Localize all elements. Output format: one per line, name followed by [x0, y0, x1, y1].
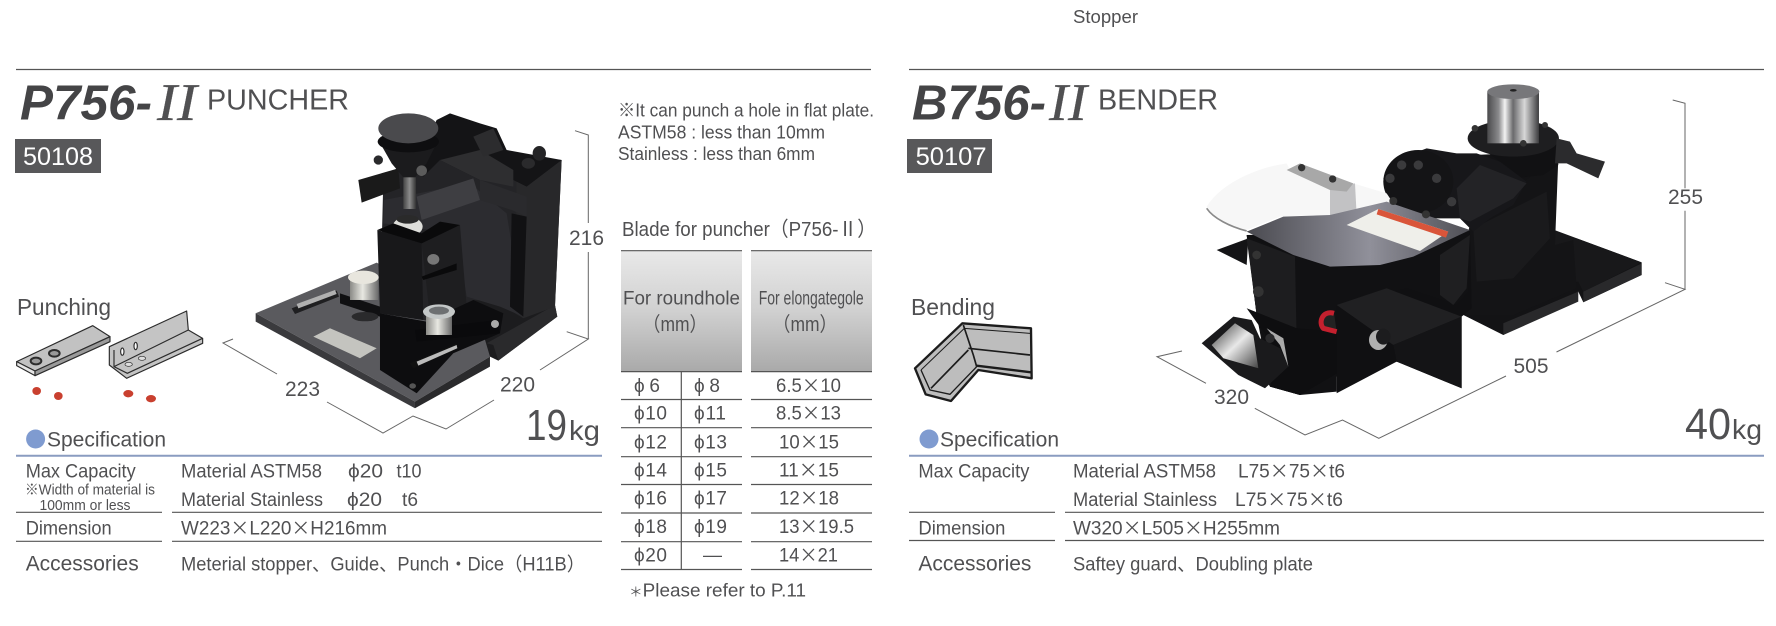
specification table: puncher: Meterial stopper、Guide、Punch・Dice（H11B）	[181, 554, 585, 576]
specification table: bender: Max Capacity	[918, 462, 1030, 482]
table: blade sizes: 12×18	[779, 483, 839, 510]
weight: 19kg	[526, 401, 600, 450]
table: blade sizes: ϕ20	[634, 546, 667, 566]
specification table: bender: Material ASTM58	[1073, 462, 1216, 482]
specification table: bender: Material Stainless	[1073, 490, 1217, 511]
table: blade sizes: ϕ17	[694, 488, 727, 509]
specification table: puncher: t6	[402, 490, 418, 511]
dimension value: 505: 505	[1514, 355, 1548, 378]
dimension lines: puncher	[223, 131, 588, 433]
weight: 40kg: kg	[1732, 414, 1762, 445]
specification table: puncher: Material ASTM58	[181, 462, 322, 482]
icon: bent angle sample	[915, 323, 1032, 401]
specification table: puncher: 100mm or less	[40, 497, 130, 514]
table: blade sizes: 11×15	[779, 456, 839, 482]
heading: P756-II PUNCHER: PUNCHER	[207, 84, 349, 116]
heading: B756-II BENDER: II	[1048, 74, 1090, 132]
table: blade sizes: ϕ6	[634, 376, 660, 397]
dimension value: 223: 223	[285, 378, 320, 401]
product code badge: 50107	[907, 139, 992, 173]
heading: P756-II PUNCHER: P756-	[20, 76, 152, 130]
specification table: puncher: ϕ20	[348, 462, 383, 482]
weight: 40kg: 40	[1685, 400, 1731, 449]
table: blade sizes: 13×19.5	[779, 512, 854, 539]
specification table: puncher: Max Capacity	[26, 462, 136, 482]
dimension value: 255: 255	[1668, 186, 1703, 209]
specification table: bender: W320×L505×H255mm	[1073, 514, 1280, 540]
table: blade sizes: 8.5×13	[776, 399, 841, 426]
table: blade sizes: ϕ15	[694, 460, 727, 482]
specification table: puncher: Material Stainless	[181, 490, 323, 511]
product code badge: 50108: 50108	[23, 143, 93, 171]
weight: 19kg: kg	[569, 415, 600, 446]
footnote: refer to P.11: ＊Please refer to P.11	[629, 580, 806, 600]
specification table: puncher: W223×L220×H216mm	[181, 514, 387, 540]
icon: punched flat bar and angle samples with slugs	[17, 311, 203, 402]
product code badge: 50108	[15, 139, 101, 173]
note: punching capacity in flat plate: Stainless : less than 6mm	[618, 144, 815, 164]
table: blade sizes: For elongategole	[759, 288, 864, 310]
table: blade sizes: ϕ12	[634, 433, 667, 454]
specification heading	[16, 429, 602, 456]
specification heading	[909, 429, 1764, 456]
heading: B756-II BENDER: BENDER	[1098, 84, 1218, 116]
specification table: bender	[909, 456, 1764, 576]
specification table: puncher: Dimension	[26, 518, 112, 540]
weight: 19kg: 19	[526, 401, 567, 450]
note: punching capacity in flat plate: ※It can punch a hole in flat plate.	[618, 101, 874, 121]
table: blade sizes: —	[703, 546, 722, 566]
specification table: puncher: Accessories	[26, 553, 139, 576]
table: blade sizes	[621, 251, 872, 569]
specification table: bender: L75×75×t6	[1235, 485, 1343, 512]
table: blade sizes: ϕ10	[634, 404, 667, 425]
dimension value: 216: 216	[569, 227, 604, 250]
table: blade sizes: 10×15	[779, 428, 839, 455]
table: blade sizes: （mm）	[643, 313, 707, 336]
heading: B756-II BENDER	[912, 74, 1218, 132]
specification table: bender: Saftey guard、Doubling plate	[1073, 555, 1313, 576]
panel: P756-II puncher	[15, 70, 876, 600]
panel: B756-II bender	[907, 70, 1764, 576]
specification table: bender: L75×75×t6	[1238, 456, 1345, 484]
table: blade sizes: ϕ19	[694, 517, 727, 538]
specification table: puncher: t10	[396, 462, 422, 482]
dimension value: 220: 220	[500, 374, 535, 397]
table: blade sizes: ϕ18	[634, 517, 667, 538]
specification table: puncher: ϕ20	[347, 490, 382, 511]
table: blade sizes: ϕ14	[634, 460, 667, 482]
product code badge: 50107: 50107	[916, 143, 987, 171]
photo: bender machine	[1202, 84, 1642, 395]
table: blade sizes: 6.5×10	[776, 371, 841, 398]
note: punching capacity in flat plate: ASTM58 : less than 10mm	[618, 122, 825, 142]
label: Punching: Punching	[17, 294, 111, 320]
dimension lines: bender	[1157, 100, 1685, 438]
note: punching capacity in flat plate	[618, 101, 874, 164]
weight: 40kg	[1685, 400, 1762, 449]
photo: puncher machine	[256, 113, 562, 408]
table: blade sizes: ϕ16	[634, 488, 667, 509]
table: blade sizes: ϕ13	[694, 433, 727, 454]
specification table: bender: Accessories	[918, 553, 1031, 576]
specification table: puncher: ※Width of material is	[25, 482, 155, 498]
specification table: bender: Dimension	[918, 518, 1005, 540]
table: blade sizes: ϕ11	[694, 404, 726, 425]
specification heading: Specification	[47, 429, 166, 452]
table: blade sizes: ϕ8	[694, 376, 720, 397]
heading: P756-II PUNCHER: II	[156, 74, 200, 132]
table: blade sizes: 14×21	[779, 540, 838, 568]
heading: blade for puncher: Blade for puncher（P756-Ⅱ）	[622, 218, 876, 241]
label: Bending: Bending	[911, 294, 995, 320]
heading: B756-II BENDER: B756-	[912, 76, 1046, 130]
specification heading: Specification	[940, 429, 1059, 452]
table: blade sizes: For roundhole	[623, 288, 740, 310]
floating caption: Stopper: Stopper	[1073, 7, 1138, 27]
specification table: puncher	[16, 462, 602, 576]
heading: P756-II PUNCHER	[20, 74, 349, 132]
dimension value: 320: 320	[1214, 386, 1249, 409]
table: blade sizes: （mm）	[773, 313, 837, 336]
